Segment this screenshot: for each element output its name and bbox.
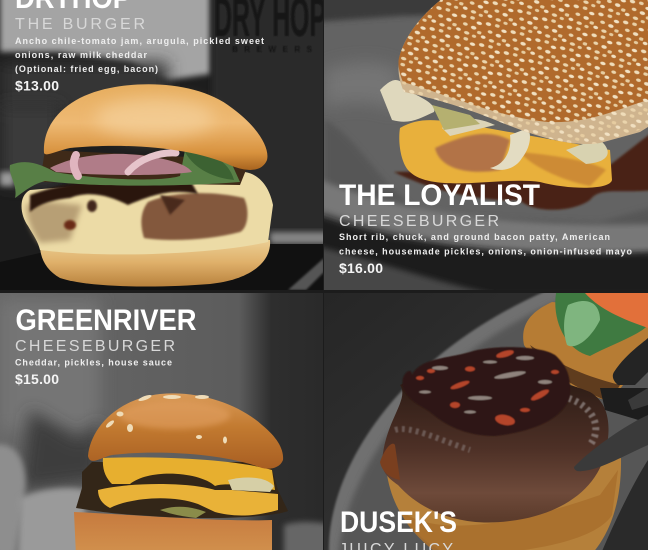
subtitle: CHEESEBURGER <box>15 338 175 355</box>
panel: Dusek's <box>324 285 648 550</box>
title: GREENRIVER <box>16 304 197 337</box>
burger: Greenriver <box>74 393 288 550</box>
glass lettering <box>214 0 326 54</box>
description: Ancho chile-tomato jam, arugula, pickled sweet <box>15 36 264 46</box>
burger: The Loyalist <box>380 0 648 210</box>
description: Cheddar, pickles, house sauce <box>15 358 172 368</box>
panel: Greenriver <box>0 293 330 550</box>
subtitle: THE BURGER <box>15 16 145 33</box>
patty <box>380 375 609 523</box>
price: $15.00 <box>15 371 59 387</box>
price: $16.00 <box>339 260 383 276</box>
bottom bun <box>387 458 621 550</box>
panel: Dryhop <box>0 0 334 295</box>
title: THE LOYALIST <box>339 179 540 212</box>
subtitle: CHEESEBURGER <box>339 213 499 230</box>
title: DUSEK'S <box>340 506 457 539</box>
burger: Dryhop <box>10 84 273 286</box>
description: onions, raw milk cheddar <box>15 50 147 60</box>
description <box>339 232 632 256</box>
panel: The Loyalist <box>314 0 648 296</box>
bacon jam topping <box>403 347 570 436</box>
sesame seeds <box>105 394 227 444</box>
back bun with lettuce and tomato <box>523 293 648 402</box>
description: (Optional: fried egg, bacon) <box>15 64 158 74</box>
glass lettering: BREWERS <box>232 45 313 54</box>
price: $13.00 <box>15 78 59 94</box>
tongs <box>574 338 648 550</box>
description <box>15 36 264 74</box>
description: Short rib, chuck, and ground bacon patty, American <box>339 232 610 242</box>
plate <box>328 293 556 550</box>
description: cheese, housemade pickles, onions, onion-infused mayo <box>339 246 632 256</box>
